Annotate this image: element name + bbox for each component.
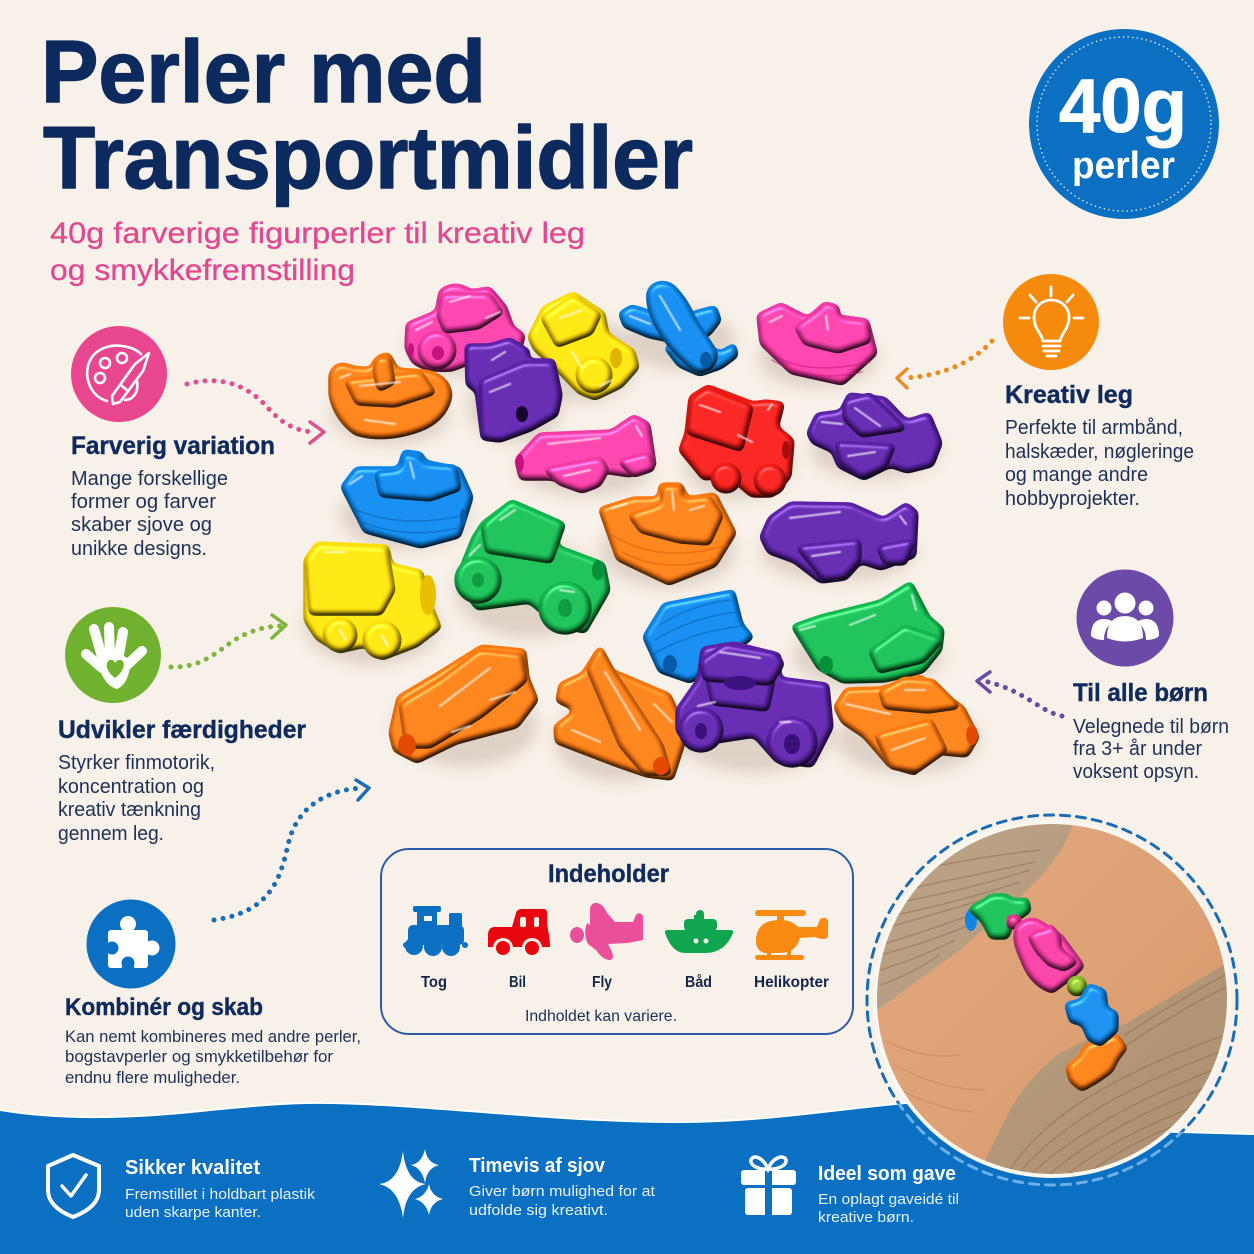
text block xyxy=(125,1186,316,1221)
arrow: pink xyxy=(187,381,324,443)
icon labels: Fly xyxy=(592,974,612,991)
text block xyxy=(818,1191,959,1226)
icon: boat xyxy=(665,910,733,953)
bead: orange plane right xyxy=(837,678,978,772)
heading: Ideel som gave xyxy=(818,1163,956,1185)
text block: Styrker finmotorik, xyxy=(58,752,215,774)
text block xyxy=(71,468,228,560)
icon: hand with heart xyxy=(65,607,161,703)
icon: sparkles xyxy=(379,1149,443,1218)
text block: Kan nemt kombineres med andre perler, xyxy=(65,1028,361,1046)
text block: Giver børn mulighed for at xyxy=(469,1183,656,1200)
heading: Sikker kvalitet xyxy=(125,1157,260,1179)
text block xyxy=(1005,417,1194,510)
heading: Kombinér og skab xyxy=(65,994,263,1021)
beads pile xyxy=(304,284,980,782)
arrow: purple xyxy=(977,672,1062,716)
text block xyxy=(469,1183,656,1219)
bead: pink car xyxy=(408,287,522,368)
bead: purple car xyxy=(679,645,830,764)
panel: udvikler færdigheder xyxy=(58,607,306,845)
text block: voksent opsyn. xyxy=(1073,761,1199,783)
panel: til alle børn xyxy=(1073,570,1229,783)
icon labels: Tog xyxy=(421,974,447,991)
feature: timevis af sjov xyxy=(379,1149,656,1219)
footer band xyxy=(0,1102,1254,1254)
panel: kombinér og skab xyxy=(65,900,361,1087)
text block: endnu flere muligheder. xyxy=(65,1069,240,1087)
bead: yellow train xyxy=(307,545,438,657)
subtitle xyxy=(50,217,585,287)
panel: farverig variation xyxy=(71,326,275,560)
text block: skaber sjove og xyxy=(71,514,212,536)
icon labels: Båd xyxy=(685,973,712,991)
heading: Timevis af sjov xyxy=(469,1155,606,1177)
subtitle: og smykkefremstilling xyxy=(50,254,355,287)
bracelet beads xyxy=(965,897,1124,1088)
text block: hobbyprojekter. xyxy=(1005,488,1140,510)
bead: blue boat xyxy=(344,453,470,545)
title: Transportmidler xyxy=(43,108,693,207)
text block: Perfekte til armbånd, xyxy=(1005,417,1183,439)
text block: En oplagt gaveidé til xyxy=(818,1191,959,1208)
title xyxy=(41,22,693,207)
text block: kreative børn. xyxy=(818,1209,914,1226)
bead: orange boat left xyxy=(332,356,449,436)
bead: purple block xyxy=(468,341,559,439)
title: Perler med xyxy=(41,22,486,121)
bead: red train xyxy=(682,388,791,494)
photo: bracelet on wrist xyxy=(860,815,1240,1190)
text block: former og farver xyxy=(71,491,216,513)
text block: unikke designs. xyxy=(71,538,207,560)
icon labels: Helikopter xyxy=(754,974,829,991)
icon: shield xyxy=(48,1155,99,1217)
bead: purple plane upper xyxy=(810,396,939,477)
icon: light bulb xyxy=(1003,274,1099,370)
text block: bogstavperler og smykketilbehør for xyxy=(65,1048,334,1066)
note: Indholdet kan variere. xyxy=(525,1008,677,1025)
bead: orange plane centre xyxy=(557,650,685,777)
icon: gift xyxy=(741,1157,796,1215)
text block: koncentration og xyxy=(58,776,204,798)
text block: Velegnede til børn xyxy=(1073,716,1229,738)
bead: green car xyxy=(458,503,607,631)
icon: train xyxy=(403,906,468,956)
feature: sikker kvalitet xyxy=(48,1155,316,1221)
text block: Fremstillet i holdbart plastik xyxy=(125,1186,316,1203)
icon: helicopter xyxy=(755,910,828,960)
feature: ideel som gave xyxy=(741,1157,959,1226)
panel: indeholder xyxy=(381,849,853,1034)
bead: pink plane xyxy=(516,418,653,490)
arrow: green xyxy=(171,615,286,667)
badge: 40g perler: perler xyxy=(1072,145,1175,187)
heading: Udvikler færdigheder xyxy=(58,716,306,744)
text block: og mange andre xyxy=(1005,464,1148,486)
icon: plane xyxy=(570,903,643,960)
icon: palette xyxy=(71,326,167,422)
icon: car xyxy=(488,909,550,958)
icon labels xyxy=(421,973,829,991)
bead: orange boat centre xyxy=(602,486,733,582)
heading: Til alle børn xyxy=(1073,679,1208,707)
heading: Indeholder xyxy=(548,860,669,888)
arrow: orange xyxy=(897,341,992,388)
text block: fra 3+ år under xyxy=(1073,738,1202,760)
heading: Farverig variation xyxy=(71,432,275,460)
bead: blue boat back xyxy=(646,593,750,680)
bead: green plane xyxy=(795,585,941,680)
icon: group of people xyxy=(1076,570,1174,666)
bead: pink boat xyxy=(760,305,874,382)
text block: uden skarpe kanter. xyxy=(125,1204,261,1221)
text block: Mange forskellige xyxy=(71,468,228,490)
bead: yellow car xyxy=(531,295,636,397)
bead: purple plane middle xyxy=(763,505,915,580)
text block xyxy=(65,1028,361,1087)
icon: puzzle piece xyxy=(86,900,176,988)
panel: kreativ leg xyxy=(1003,274,1194,510)
text block: udfolde sig kreativt. xyxy=(469,1202,608,1219)
text block xyxy=(58,752,215,845)
badge: 40g perler: 40g xyxy=(1059,64,1187,149)
heading: Kreativ leg xyxy=(1005,381,1133,409)
icon labels: Bil xyxy=(509,974,526,991)
bead: orange plane left xyxy=(392,648,535,760)
text block: gennem leg. xyxy=(58,823,164,845)
subtitle: 40g farverige figurperler til kreativ leg xyxy=(50,217,585,250)
text block: kreativ tænkning xyxy=(58,799,201,821)
bead: blue plane xyxy=(622,284,735,373)
badge: 40g perler xyxy=(1029,29,1219,219)
arrow: blue xyxy=(214,780,369,920)
text block xyxy=(1073,716,1229,783)
text block: halskæder, nøgleringe xyxy=(1005,441,1194,463)
